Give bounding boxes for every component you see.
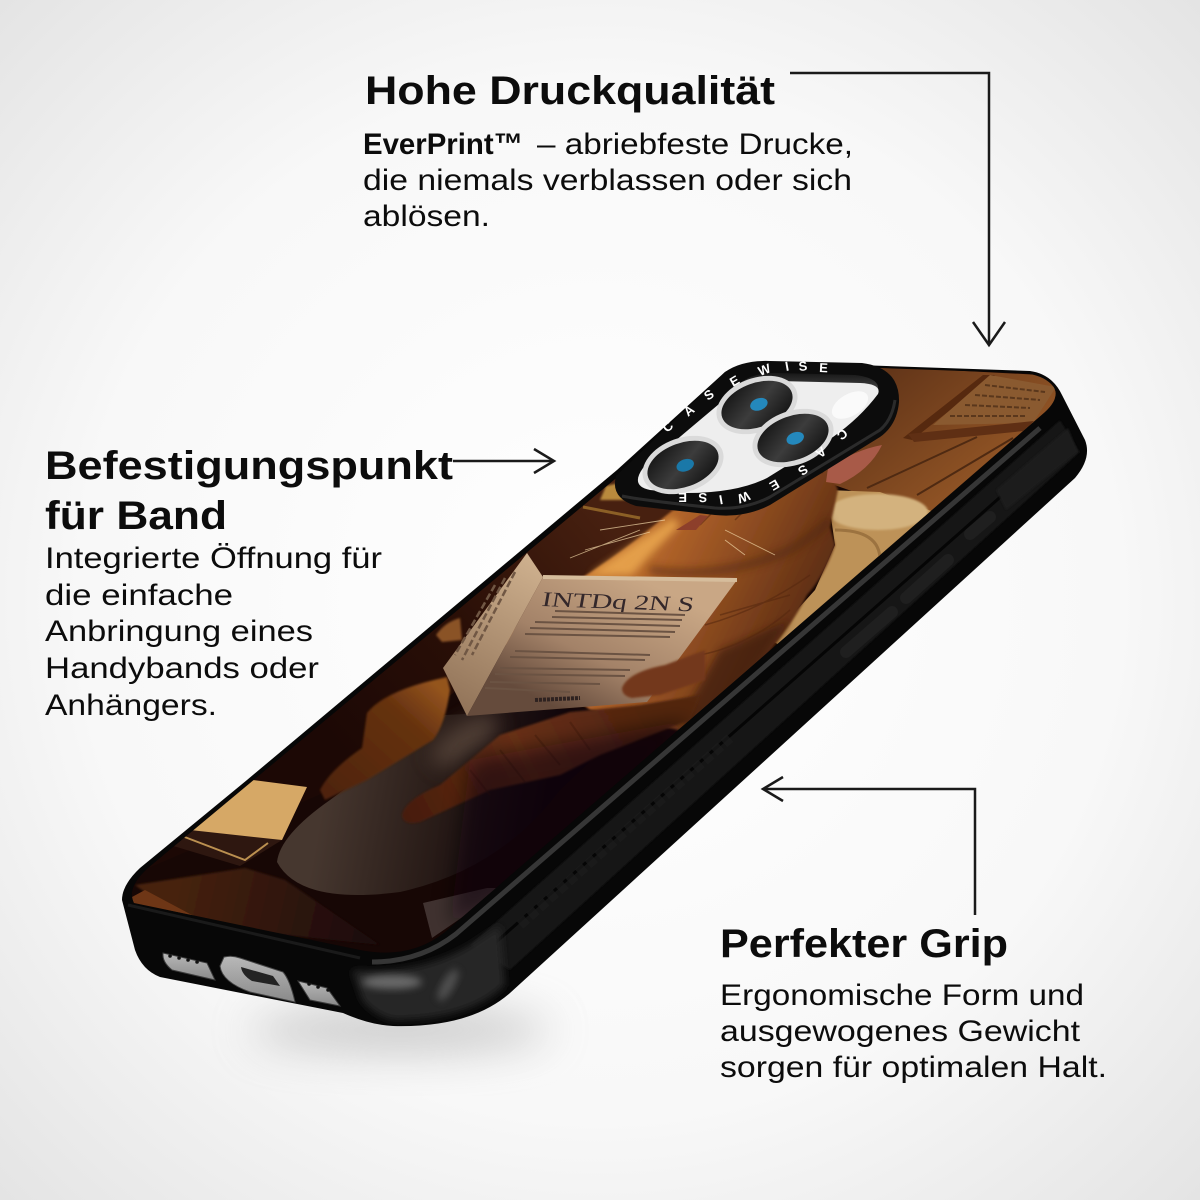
side buttons [846, 517, 990, 652]
plate highlight [828, 494, 928, 530]
speaker left [163, 953, 215, 980]
arrow: grip [763, 777, 975, 915]
line 1: Ergonomische Form und [720, 979, 1084, 1012]
beam [903, 375, 995, 440]
lens right pupil [785, 430, 806, 447]
notice [933, 375, 1056, 425]
ring bevel [622, 400, 895, 508]
label: EverPrint: EverPrint™ [363, 128, 523, 161]
line 2: ausgewogenes Gewicht [720, 1015, 1081, 1048]
carpet [135, 868, 380, 945]
book page edge [182, 836, 268, 860]
lens top [708, 365, 806, 445]
phone shadow [250, 1008, 550, 1052]
phone print: cat reading a newspaper [132, 368, 1056, 952]
camera glass [638, 381, 879, 493]
port opening [241, 967, 280, 986]
brand text top: CASEWISE [659, 358, 829, 435]
lens right [744, 398, 842, 478]
line 1: – abriebfeste Drucke, [537, 128, 853, 161]
lens top pupil [748, 396, 769, 413]
port [220, 956, 295, 1002]
toilet bowl [277, 710, 542, 895]
newspaper left copy [455, 572, 515, 660]
camera ring [615, 361, 899, 516]
floor paper [423, 888, 496, 938]
corner sheen [352, 925, 505, 1020]
side switch [996, 428, 1078, 510]
lens top glass [715, 372, 799, 438]
lens left pupil [675, 457, 696, 474]
speaker right [298, 981, 340, 1006]
heading: Befestigungspunkt für Band [45, 444, 453, 538]
arrow: print quality [790, 73, 1005, 345]
heading: Perfekter Grip: Perfekter Grip [720, 922, 1008, 966]
speaker holes left [170, 956, 197, 962]
cat neck shadow [650, 520, 830, 572]
text block: strap [45, 542, 382, 722]
newspaper top edge [543, 577, 737, 580]
cat paw on paper [622, 650, 705, 698]
rim highlight [372, 428, 1040, 962]
lens right glass [751, 405, 835, 471]
newspaper footer [535, 698, 580, 700]
text block: EverPrint [363, 128, 853, 233]
lens left glass [641, 432, 725, 498]
line 3: sorgen für optimalen Halt. [720, 1051, 1107, 1084]
line 3: Anbringung eines [45, 615, 313, 648]
lens left bezel [634, 425, 732, 505]
cat ear [826, 445, 882, 484]
newspaper right page [467, 577, 737, 716]
plate shading [835, 530, 880, 560]
arrow: strap [453, 449, 554, 473]
camera module [615, 358, 899, 516]
line 3: ablösen. [363, 200, 490, 233]
cat body [500, 470, 838, 735]
newspaper headline: INTDq 2N S [540, 587, 696, 616]
line 2: die niemals verblassen oder sich [363, 164, 852, 197]
ring recess [738, 373, 878, 390]
side groove [487, 462, 1040, 950]
cat lit fur [590, 518, 680, 575]
line 1: Befestigungspunkt [45, 444, 453, 488]
line 4: Handybands oder [45, 652, 319, 685]
lower dark [450, 720, 690, 925]
frame [908, 421, 1034, 442]
leg stripes [470, 722, 586, 770]
line 1: Integrierte Öffnung für [45, 542, 382, 575]
notice lines [950, 385, 1045, 416]
text block: grip [720, 979, 1107, 1084]
cat right leg [402, 695, 700, 823]
sheen base [352, 925, 505, 1020]
sheen streak [435, 968, 461, 1002]
newspaper left page [443, 553, 543, 716]
floor board [132, 890, 205, 922]
flash [827, 385, 873, 425]
lens right bezel [744, 398, 842, 478]
cat left leg [320, 677, 450, 800]
cat paw top [436, 618, 462, 642]
whiskers [570, 520, 775, 558]
speaker holes right [309, 984, 328, 990]
brand text bottom: CASEWISE [678, 426, 851, 507]
book pile [170, 828, 282, 866]
side face [470, 420, 1080, 970]
wall streak [583, 507, 640, 518]
dark wall [332, 478, 674, 720]
lens top bezel [708, 365, 806, 445]
plate [770, 490, 934, 648]
case body [122, 362, 1087, 1026]
line 2: für Band [45, 494, 227, 538]
sheen spot [362, 975, 422, 989]
lit corner near camera [599, 482, 625, 502]
line 2: die einfache [45, 579, 233, 612]
line 5: Anhängers. [45, 689, 217, 722]
cat nose [676, 515, 708, 530]
wood wall [820, 366, 1060, 520]
newspaper copy lines [485, 611, 685, 692]
plank lines [867, 437, 1013, 495]
grip texture [520, 738, 730, 925]
toilet top [428, 712, 504, 772]
phone case [122, 362, 1087, 1026]
heading: Hohe Druckqualität: Hohe Druckqualität [365, 69, 775, 113]
bottom lip [128, 905, 360, 958]
cat fur stripes [700, 505, 810, 655]
base scene colour [132, 372, 1030, 952]
open book [190, 780, 307, 840]
lens left [634, 425, 732, 505]
cat dark flank [680, 620, 790, 735]
